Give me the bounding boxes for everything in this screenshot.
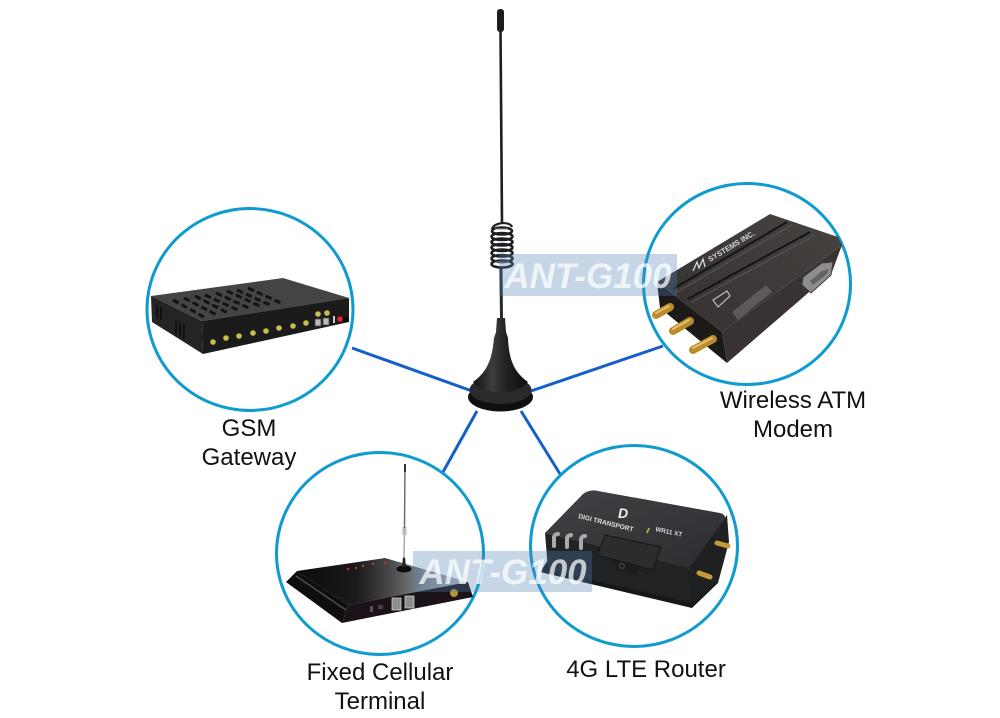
watermark: ANT-G100 top: ANT-G100 <box>503 257 672 296</box>
panel: wireless ATM modem <box>644 184 850 384</box>
device: ATM modem <box>656 214 842 363</box>
watermark: ANT-G100 bottom: ANT-G100 <box>418 553 587 592</box>
antenna tip <box>497 9 504 32</box>
antenna spring coil <box>492 223 512 268</box>
connector line: GSM gateway to antenna <box>352 348 472 391</box>
panel: 4G LTE router <box>530 446 738 646</box>
device: fixed cellular terminal <box>286 464 473 623</box>
antenna <box>468 9 533 412</box>
label: Wireless ATM Modem: Wireless ATM <box>720 387 866 414</box>
label: Fixed Cellular Terminal: Terminal <box>335 688 425 715</box>
label: 4G LTE Router: 4G LTE Router <box>566 656 726 683</box>
circle outline <box>276 452 484 654</box>
connector line: fixed cellular terminal to antenna <box>443 411 477 472</box>
device: 4G LTE router <box>540 490 729 608</box>
circle outline <box>147 208 353 410</box>
label: Wireless ATM Modem: Modem <box>753 416 833 443</box>
panel: GSM gateway <box>147 208 353 410</box>
connector line: wireless ATM modem to antenna <box>531 346 663 391</box>
router logo text: D <box>618 505 628 521</box>
connector line: 4G LTE router to antenna <box>521 411 560 474</box>
device: GSM gateway box <box>151 278 349 354</box>
label: GSM Gateway: GSM <box>222 415 276 442</box>
antenna upper rod <box>500 30 502 224</box>
panel: fixed cellular terminal <box>276 452 484 654</box>
circle outline <box>530 446 738 646</box>
router model text: DIGI TRANSPORT <box>578 513 634 534</box>
label: GSM Gateway: Gateway <box>202 444 296 471</box>
label: Fixed Cellular Terminal: Fixed Cellular <box>307 659 453 686</box>
circle outline <box>644 184 850 384</box>
antenna magnetic base <box>468 318 533 412</box>
modem brand text: SYSTEMS INC. <box>706 229 756 264</box>
router variant text: WR11 XT <box>655 526 683 539</box>
antenna lower rod <box>500 268 503 320</box>
